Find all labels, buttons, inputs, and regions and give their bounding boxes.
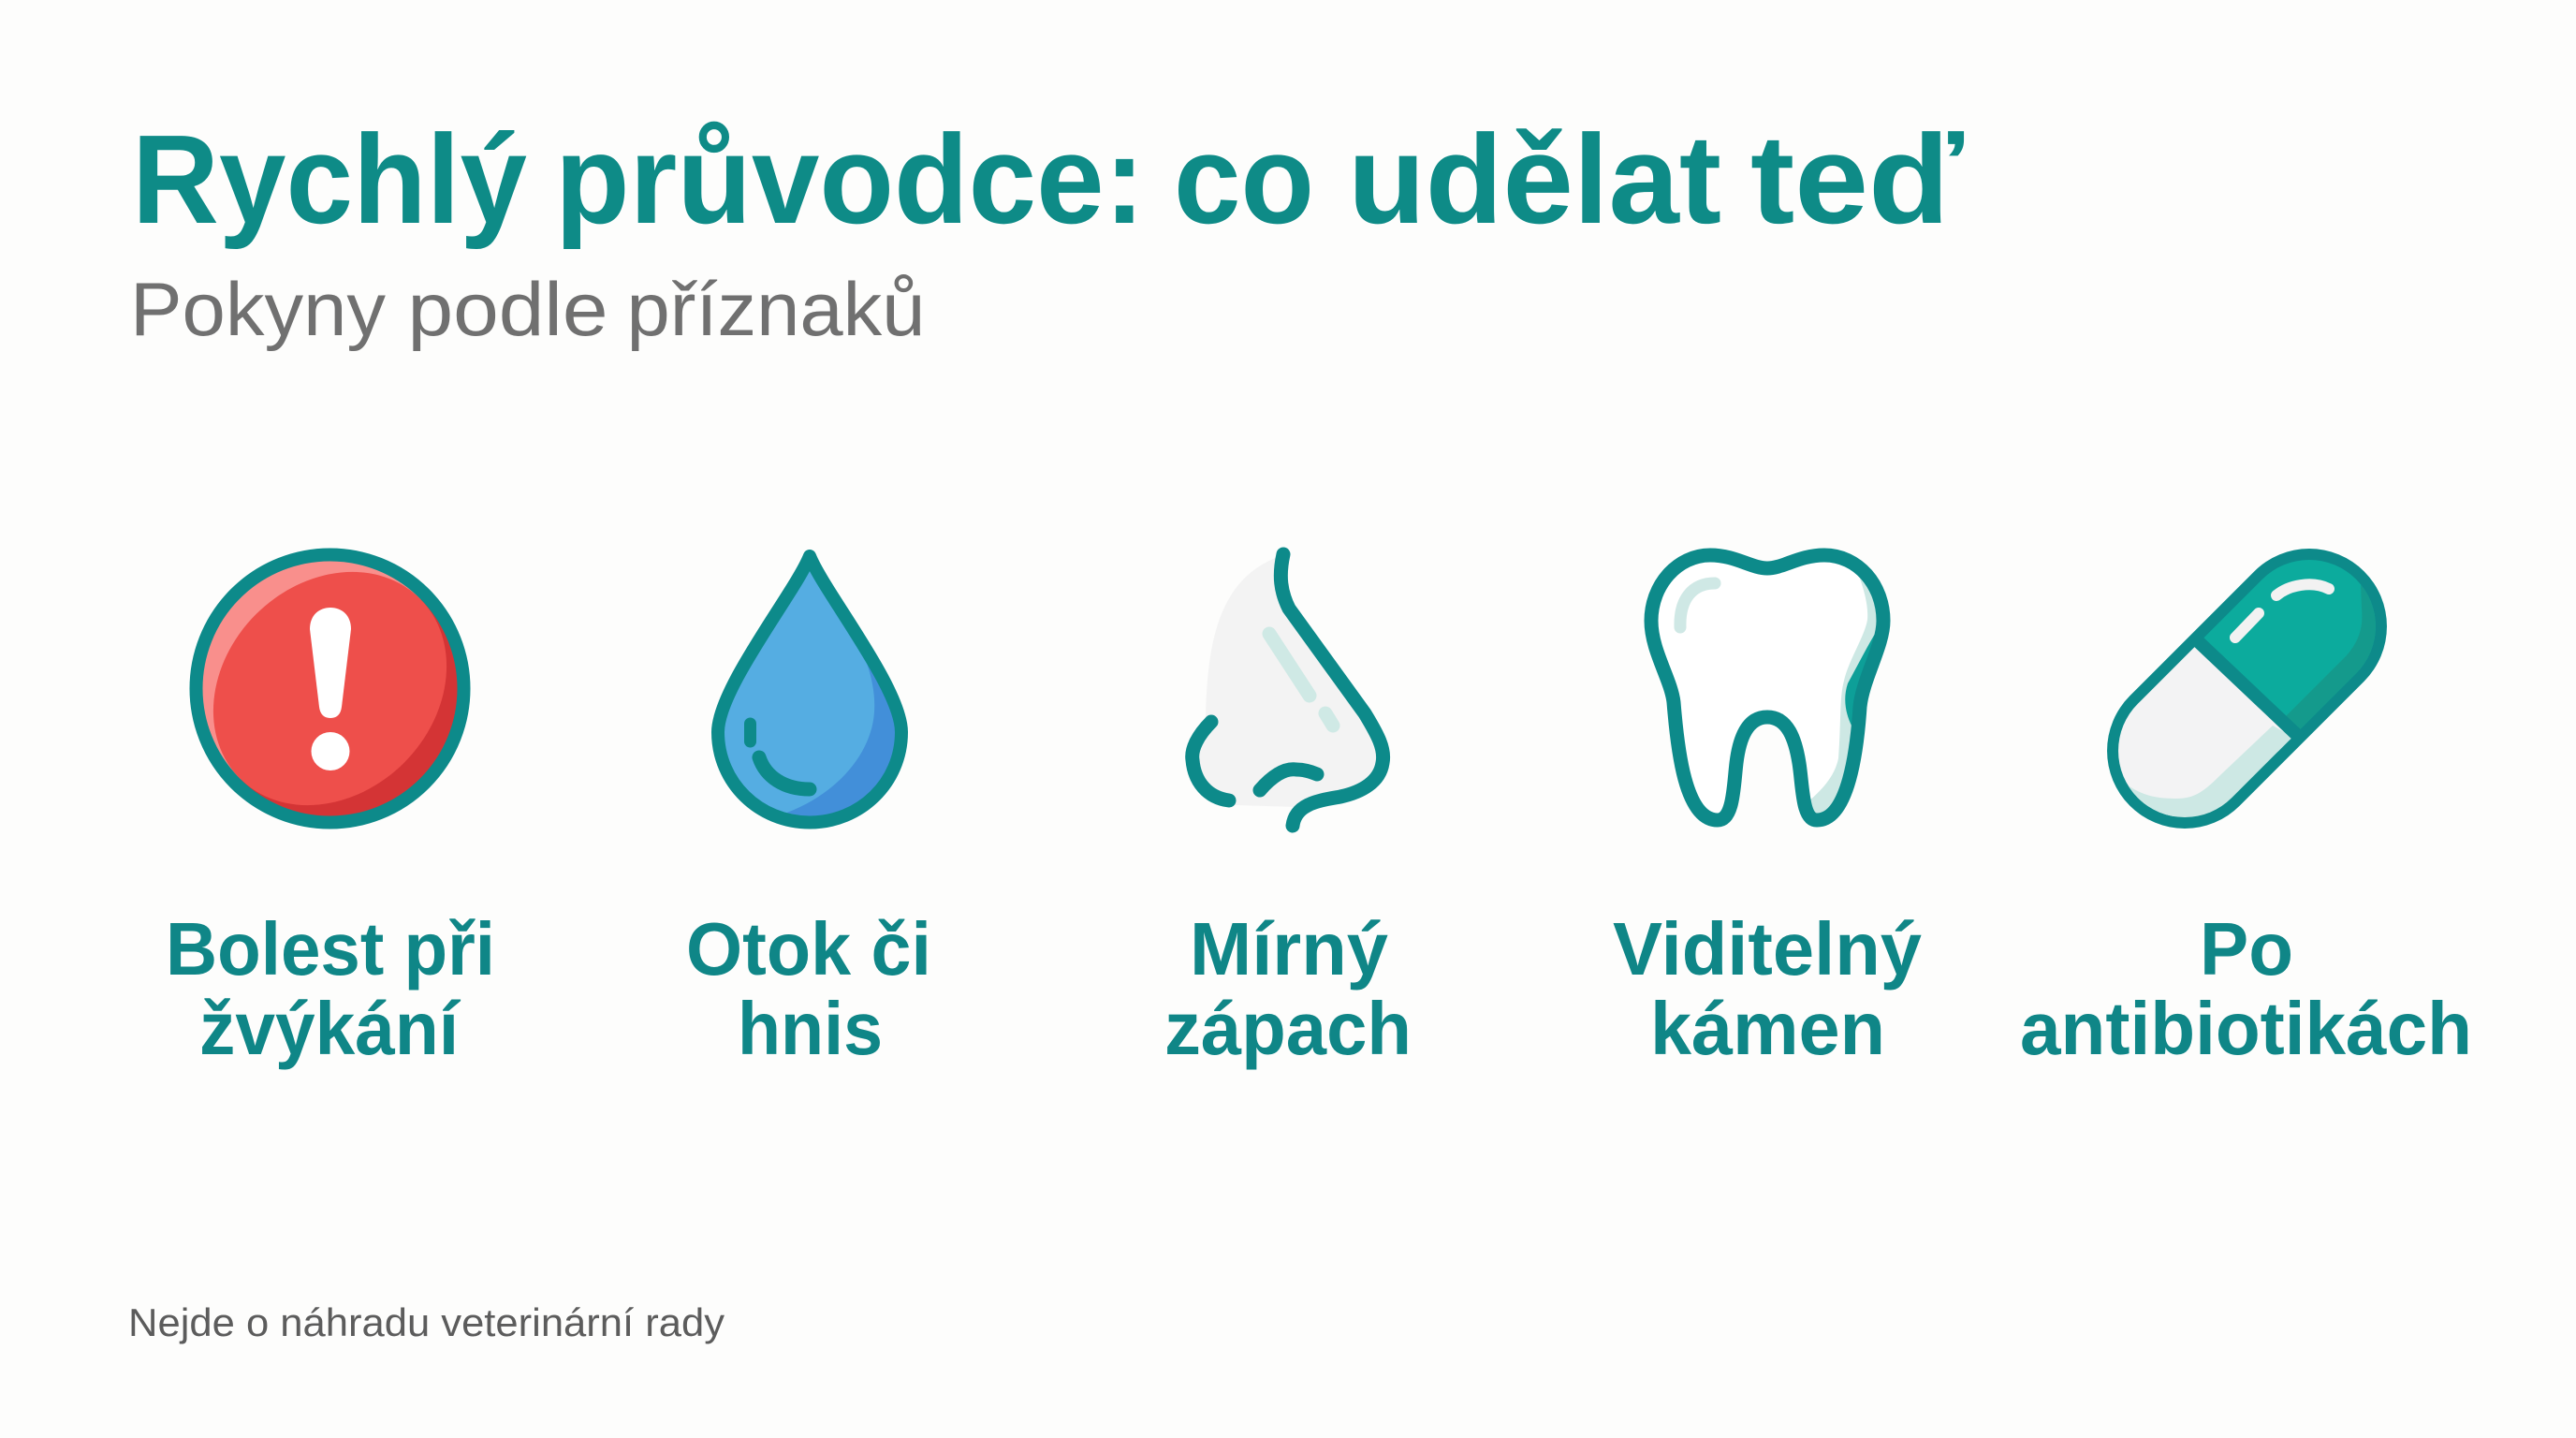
title: Rychlý xyxy=(132,109,527,250)
subtitle: příznaků xyxy=(627,268,925,352)
icon: capsule xyxy=(2107,549,2387,829)
label: Viditelný kámen: kámen xyxy=(1650,987,1885,1070)
label: Otok či hnis: hnis xyxy=(738,987,883,1070)
title: teď xyxy=(1750,109,1965,250)
icon: tooth xyxy=(1651,555,1891,824)
subtitle: Pokyny xyxy=(130,268,387,352)
title: co xyxy=(1174,109,1314,250)
label: Mírný zápach xyxy=(1164,907,1412,1070)
subtitle: podle xyxy=(408,268,608,352)
label: Otok či hnis xyxy=(686,907,931,1070)
subtitle xyxy=(130,268,925,352)
label: Mírný zápach: zápach xyxy=(1164,987,1412,1070)
title: udělat xyxy=(1348,109,1721,250)
label: Bolest při žvýkání xyxy=(166,907,495,1070)
label: Bolest při žvýkání: Bolest při xyxy=(166,907,495,990)
label: Viditelný kámen xyxy=(1613,907,1923,1070)
label: Po antibiotikách: Po xyxy=(2200,907,2293,990)
title xyxy=(132,109,1965,250)
label: Po antibiotikách xyxy=(2020,907,2472,1070)
footer note: Nejde o náhradu veterinární rady xyxy=(128,1300,724,1344)
label: Po antibiotikách: antibiotikách xyxy=(2020,987,2472,1070)
icon: red warning circle xyxy=(189,549,470,829)
icon: nose xyxy=(1191,552,1383,826)
title: průvodce: xyxy=(555,109,1145,250)
label: Viditelný kámen: Viditelný xyxy=(1613,907,1923,990)
label: Otok či hnis: Otok či xyxy=(686,907,931,990)
label: Bolest při žvýkání: žvýkání xyxy=(199,987,461,1070)
label: Mírný zápach: Mírný xyxy=(1190,907,1389,990)
icon: blue drop xyxy=(707,548,913,833)
